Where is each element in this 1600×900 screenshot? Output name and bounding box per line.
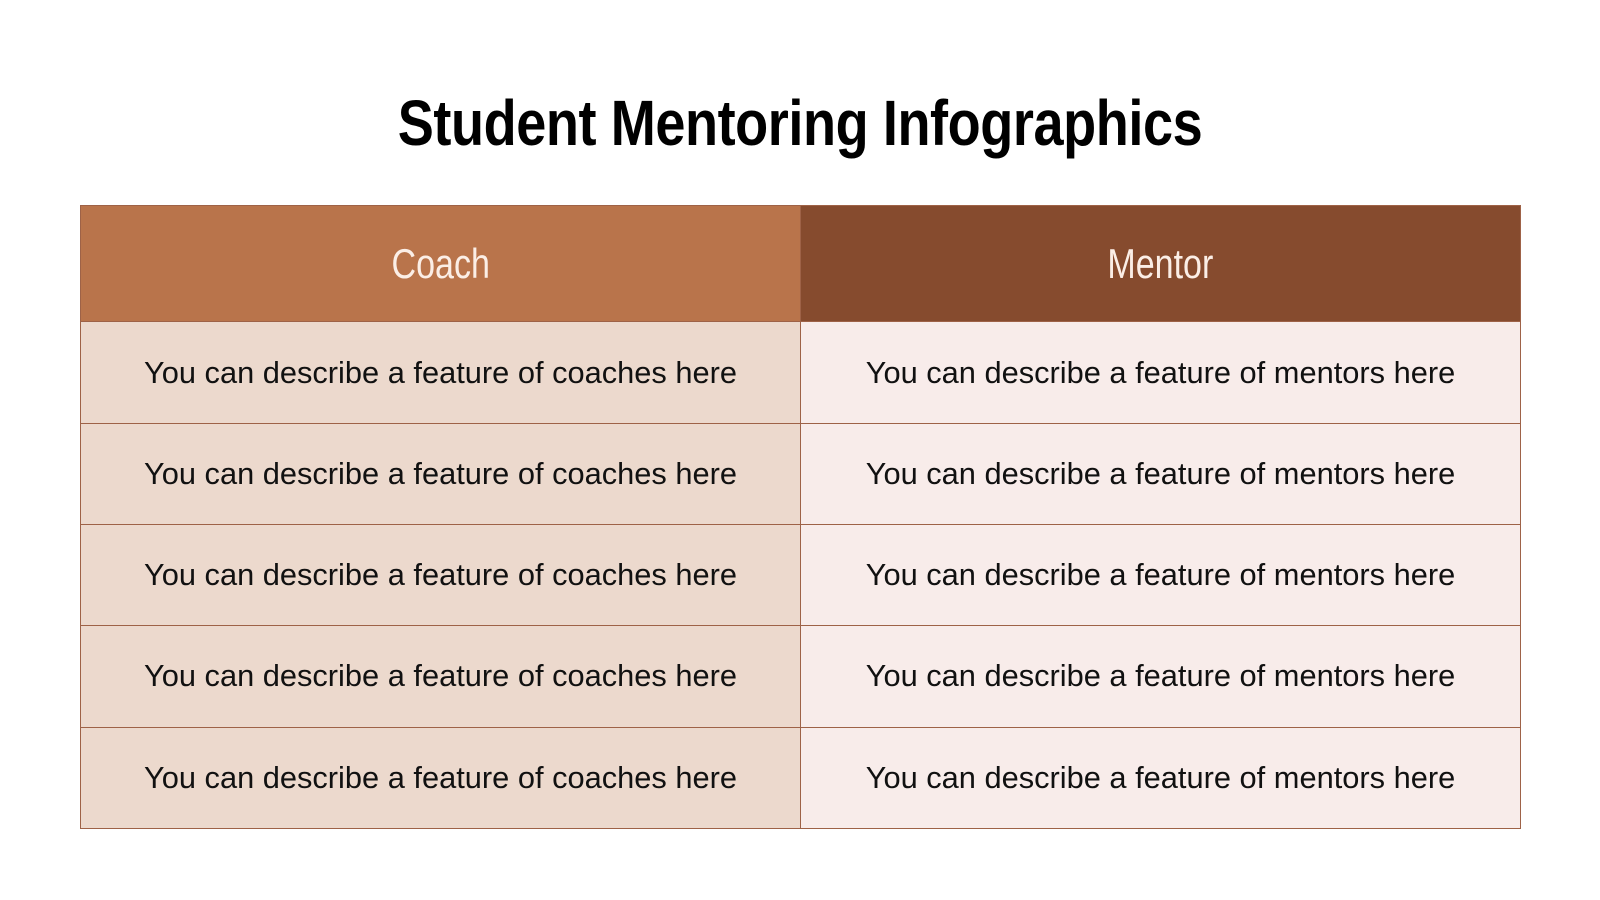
- table: coach vs mentor: You can describe a feature of coaches here: [144, 658, 737, 693]
- title: Student Mentoring Infographics: [398, 87, 1202, 159]
- table: coach vs mentor: You can describe a feature of mentors here: [866, 760, 1455, 795]
- table: coach vs mentor: Mentor: [1108, 240, 1213, 287]
- table: coach vs mentor: [80, 205, 1521, 829]
- table: coach vs mentor: You can describe a feature of mentors here: [866, 456, 1455, 491]
- table: coach vs mentor: You can describe a feature of coaches here: [144, 355, 737, 390]
- table: coach vs mentor: Coach: [391, 240, 490, 287]
- table: coach vs mentor: You can describe a feature of mentors here: [866, 557, 1455, 592]
- table: coach vs mentor: You can describe a feature of mentors here: [866, 355, 1455, 390]
- table: coach vs mentor: You can describe a feature of coaches here: [144, 557, 737, 592]
- table: coach vs mentor: You can describe a feature of coaches here: [144, 760, 737, 795]
- table: coach vs mentor: You can describe a feature of coaches here: [144, 456, 737, 491]
- table: coach vs mentor: You can describe a feature of mentors here: [866, 658, 1455, 693]
